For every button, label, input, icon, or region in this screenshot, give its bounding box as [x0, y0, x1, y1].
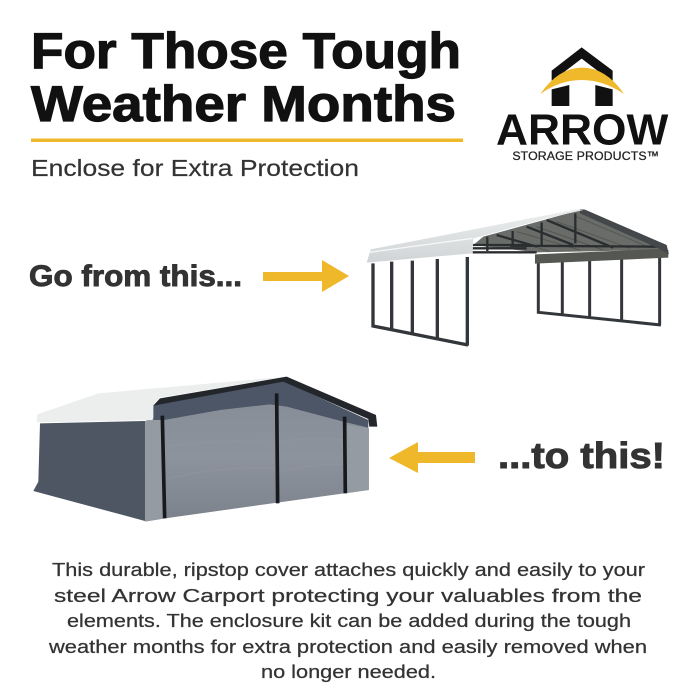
logo wordmark: ARROW: [496, 105, 669, 154]
enclosure gable: [153, 381, 368, 428]
enclosure fabric wrinkles: [165, 439, 343, 480]
body paragraph: This durable, ripstop cover attaches quickly and easily to your: [52, 559, 645, 580]
icon: house roof: [552, 47, 613, 81]
carport fascia: [535, 249, 668, 264]
logo tagline: STORAGE PRODUCTS™: [512, 149, 659, 163]
body paragraph: elements. The enclosure kit can be added during the tough: [67, 610, 631, 631]
illustration: enclosed carport: [33, 377, 377, 522]
arrow: left: [389, 442, 475, 473]
carport dark roof edge: [580, 209, 669, 254]
title: For Those Tough: [31, 23, 461, 79]
icon: yellow swoosh: [540, 68, 624, 94]
illustration: open carport: [367, 209, 669, 346]
title: Weather Months: [31, 76, 456, 132]
enclosure black straps: [162, 393, 345, 518]
body paragraph: steel Arrow Carport protecting your valuables from the: [54, 585, 642, 606]
icon: house posts: [552, 85, 613, 106]
body paragraph: [48, 559, 647, 682]
carport underside: [473, 210, 667, 252]
body paragraph: weather months for extra protection and easily removed when: [48, 636, 647, 657]
enclosure left wall: [33, 421, 145, 521]
enclosure dark roof edge: [153, 377, 377, 427]
enclosure front wall: [145, 393, 368, 522]
title: [31, 23, 461, 132]
carport underside corrugation: [503, 217, 650, 252]
carport rafters: [473, 213, 658, 252]
subtitle: Enclose for Extra Protection: [31, 155, 359, 181]
carport near side posts: [373, 257, 468, 346]
logo: Arrow Storage Products: [496, 47, 669, 163]
carport roof fold line: [369, 238, 473, 252]
enclosure white roof: [37, 377, 283, 422]
arrow: right: [263, 260, 349, 292]
title underline: [31, 138, 463, 142]
carport far side posts: [538, 248, 661, 325]
carport white roof: [367, 209, 583, 263]
label: to this: ...to this!: [498, 435, 665, 476]
label: go from this: Go from this...: [29, 260, 242, 293]
enclosure side strips: [145, 418, 369, 522]
body paragraph: no longer needed.: [261, 661, 436, 682]
